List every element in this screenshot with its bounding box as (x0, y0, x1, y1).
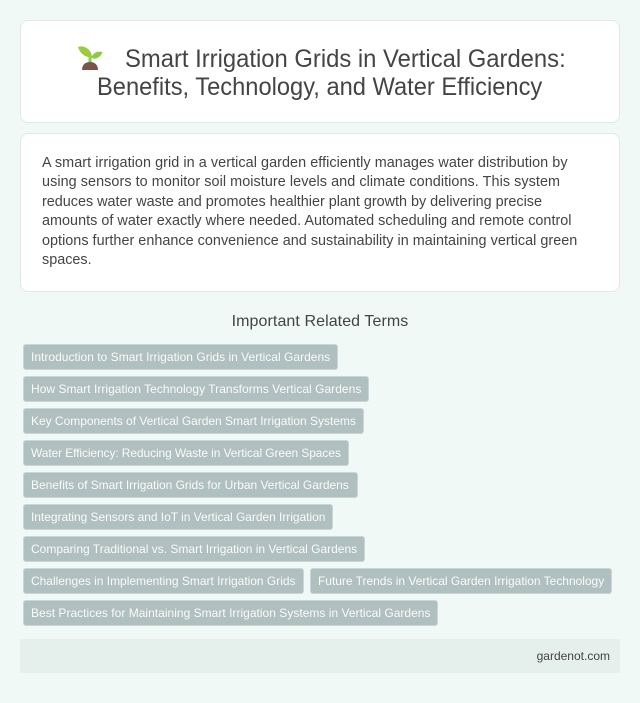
footer bar (20, 639, 620, 673)
tag 10: Best Practices for Maintaining Smart Irrigation Systems in Vertical Gardens (31, 606, 431, 620)
tag 3: Key Components of Vertical Garden Smart Irrigation Systems (31, 414, 356, 428)
tag 2 (23, 376, 369, 402)
tag 4: Water Efficiency: Reducing Waste in Vertical Green Spaces (31, 446, 341, 460)
description text: A smart irrigation grid in a vertical garden efficiently manages water distribution by (42, 155, 568, 171)
description text: options further enhance convenience and sustainability in maintaining vertical green (42, 233, 577, 249)
tag 9: Future Trends in Vertical Garden Irrigation Technology (318, 574, 604, 588)
tag 1 (23, 344, 338, 370)
tag 5 (23, 472, 358, 498)
tag 6 (23, 504, 333, 530)
panel: related term tags (23, 344, 612, 626)
title line 2: Benefits, Technology, and Water Efficiency (97, 73, 542, 101)
tag 8 (23, 568, 304, 594)
heading: important related terms: Important Related Terms (232, 313, 408, 330)
panel: title card (20, 20, 620, 123)
panel: description (20, 133, 620, 292)
icon: seedling (78, 46, 102, 70)
tag 2: How Smart Irrigation Technology Transforms Vertical Gardens (31, 382, 361, 396)
tag 7 (23, 536, 365, 562)
title line 1: Smart Irrigation Grids in Vertical Gardens: (125, 45, 566, 73)
description text: reduces water waste and promotes healthier plant growth by delivering precise (42, 194, 542, 210)
tag 8: Challenges in Implementing Smart Irrigation Grids (31, 574, 295, 588)
description text (42, 155, 577, 268)
tag 1: Introduction to Smart Irrigation Grids in Vertical Gardens (31, 350, 330, 364)
tag 7: Comparing Traditional vs. Smart Irrigation in Vertical Gardens (31, 542, 357, 556)
tag 3 (23, 408, 364, 434)
tag 10 (23, 600, 438, 626)
description text: using sensors to monitor soil moisture levels and climate conditions. This system (42, 174, 560, 190)
tag 6: Integrating Sensors and IoT in Vertical Garden Irrigation (31, 510, 325, 524)
footer source text: gardenot.com (537, 649, 610, 663)
description text: amounts of water exactly where needed. Automated scheduling and remote control (42, 213, 572, 229)
tag 5: Benefits of Smart Irrigation Grids for Urban Vertical Gardens (31, 478, 349, 492)
description text: spaces. (42, 252, 92, 268)
tag 9 (310, 568, 612, 594)
tag 4 (23, 440, 349, 466)
